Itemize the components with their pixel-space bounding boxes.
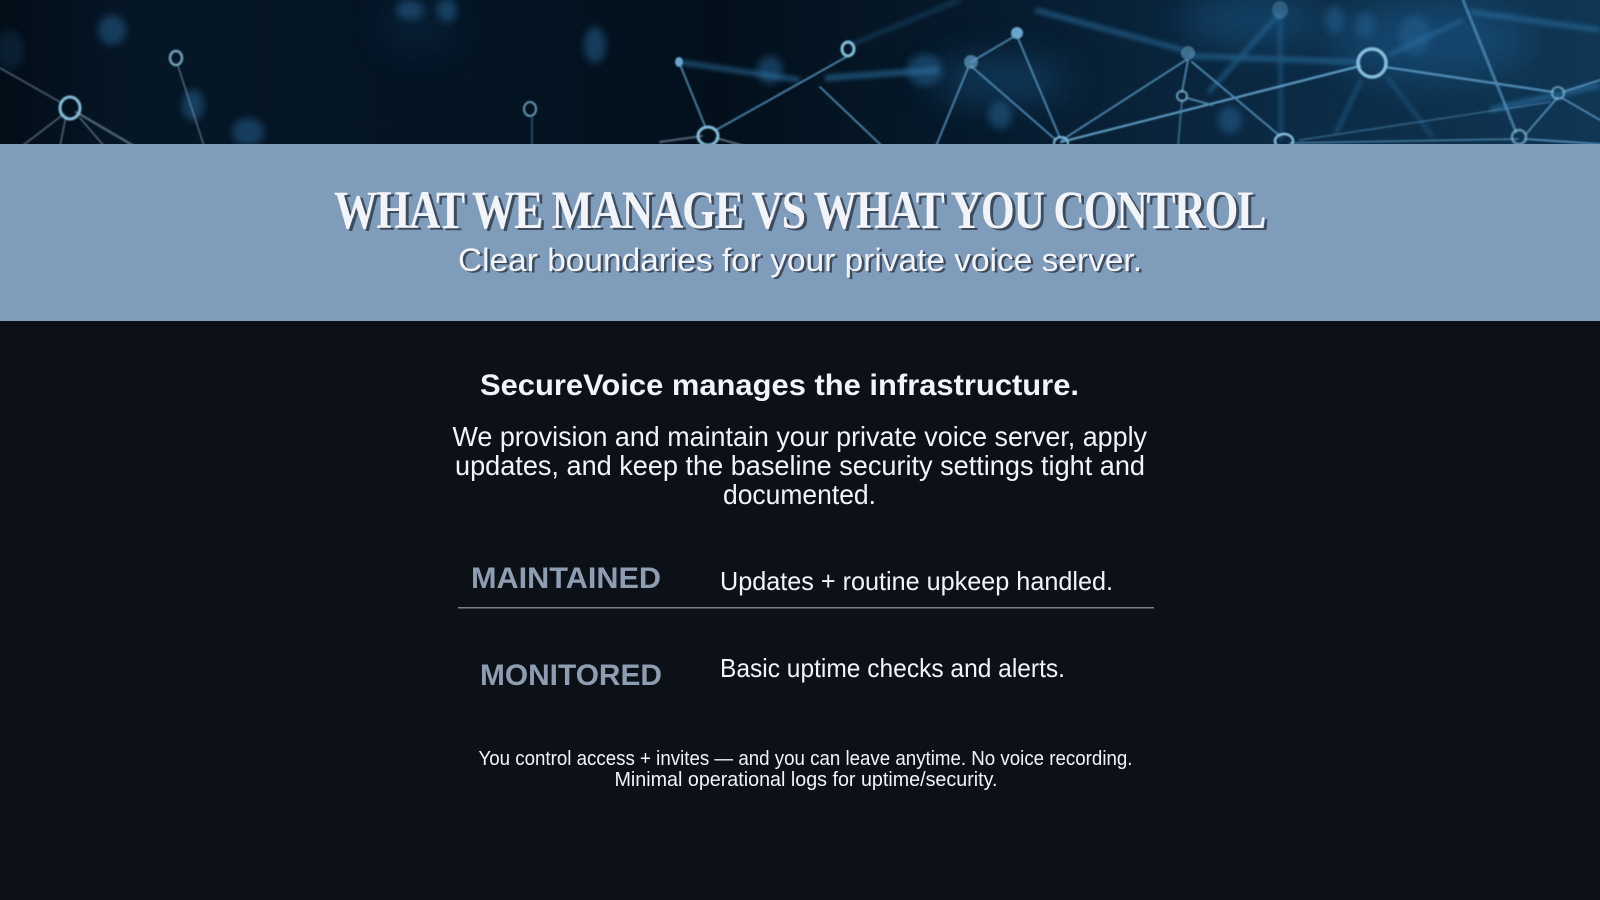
row: maintained (471, 562, 1113, 596)
footer note: Minimal operational logs for uptime/security. (614, 769, 998, 791)
subtitle: Clear boundaries for your private voice server. (458, 242, 1142, 278)
label: monitored: MONITORED (480, 659, 662, 692)
subtitle: Clear boundaries for your private voice server. (460, 244, 1144, 280)
header band (0, 144, 1600, 321)
body paragraph: documented. (723, 479, 876, 510)
body paragraph: We provision and maintain your private voice server, apply (452, 421, 1147, 452)
heading: infrastructure: SecureVoice manages the infrastructure. (480, 369, 1079, 402)
title: WHAT WE MANAGE VS WHAT YOU CONTROL (337, 182, 1268, 242)
description: maintained: Updates + routine upkeep handled. (720, 566, 1113, 596)
label: maintained: MAINTAINED (471, 562, 661, 595)
title: WHAT WE MANAGE VS WHAT YOU CONTROL (334, 180, 1265, 240)
banner: network image (0, 0, 1600, 149)
footer note: You control access + invites — and you can leave anytime. No voice recording. (478, 748, 1132, 770)
description: monitored: Basic uptime checks and alerts. (720, 653, 1065, 683)
body paragraph (452, 421, 1147, 510)
footer note (478, 748, 1132, 791)
row: monitored (480, 653, 1065, 692)
body paragraph: updates, and keep the baseline security settings tight and (455, 450, 1145, 481)
